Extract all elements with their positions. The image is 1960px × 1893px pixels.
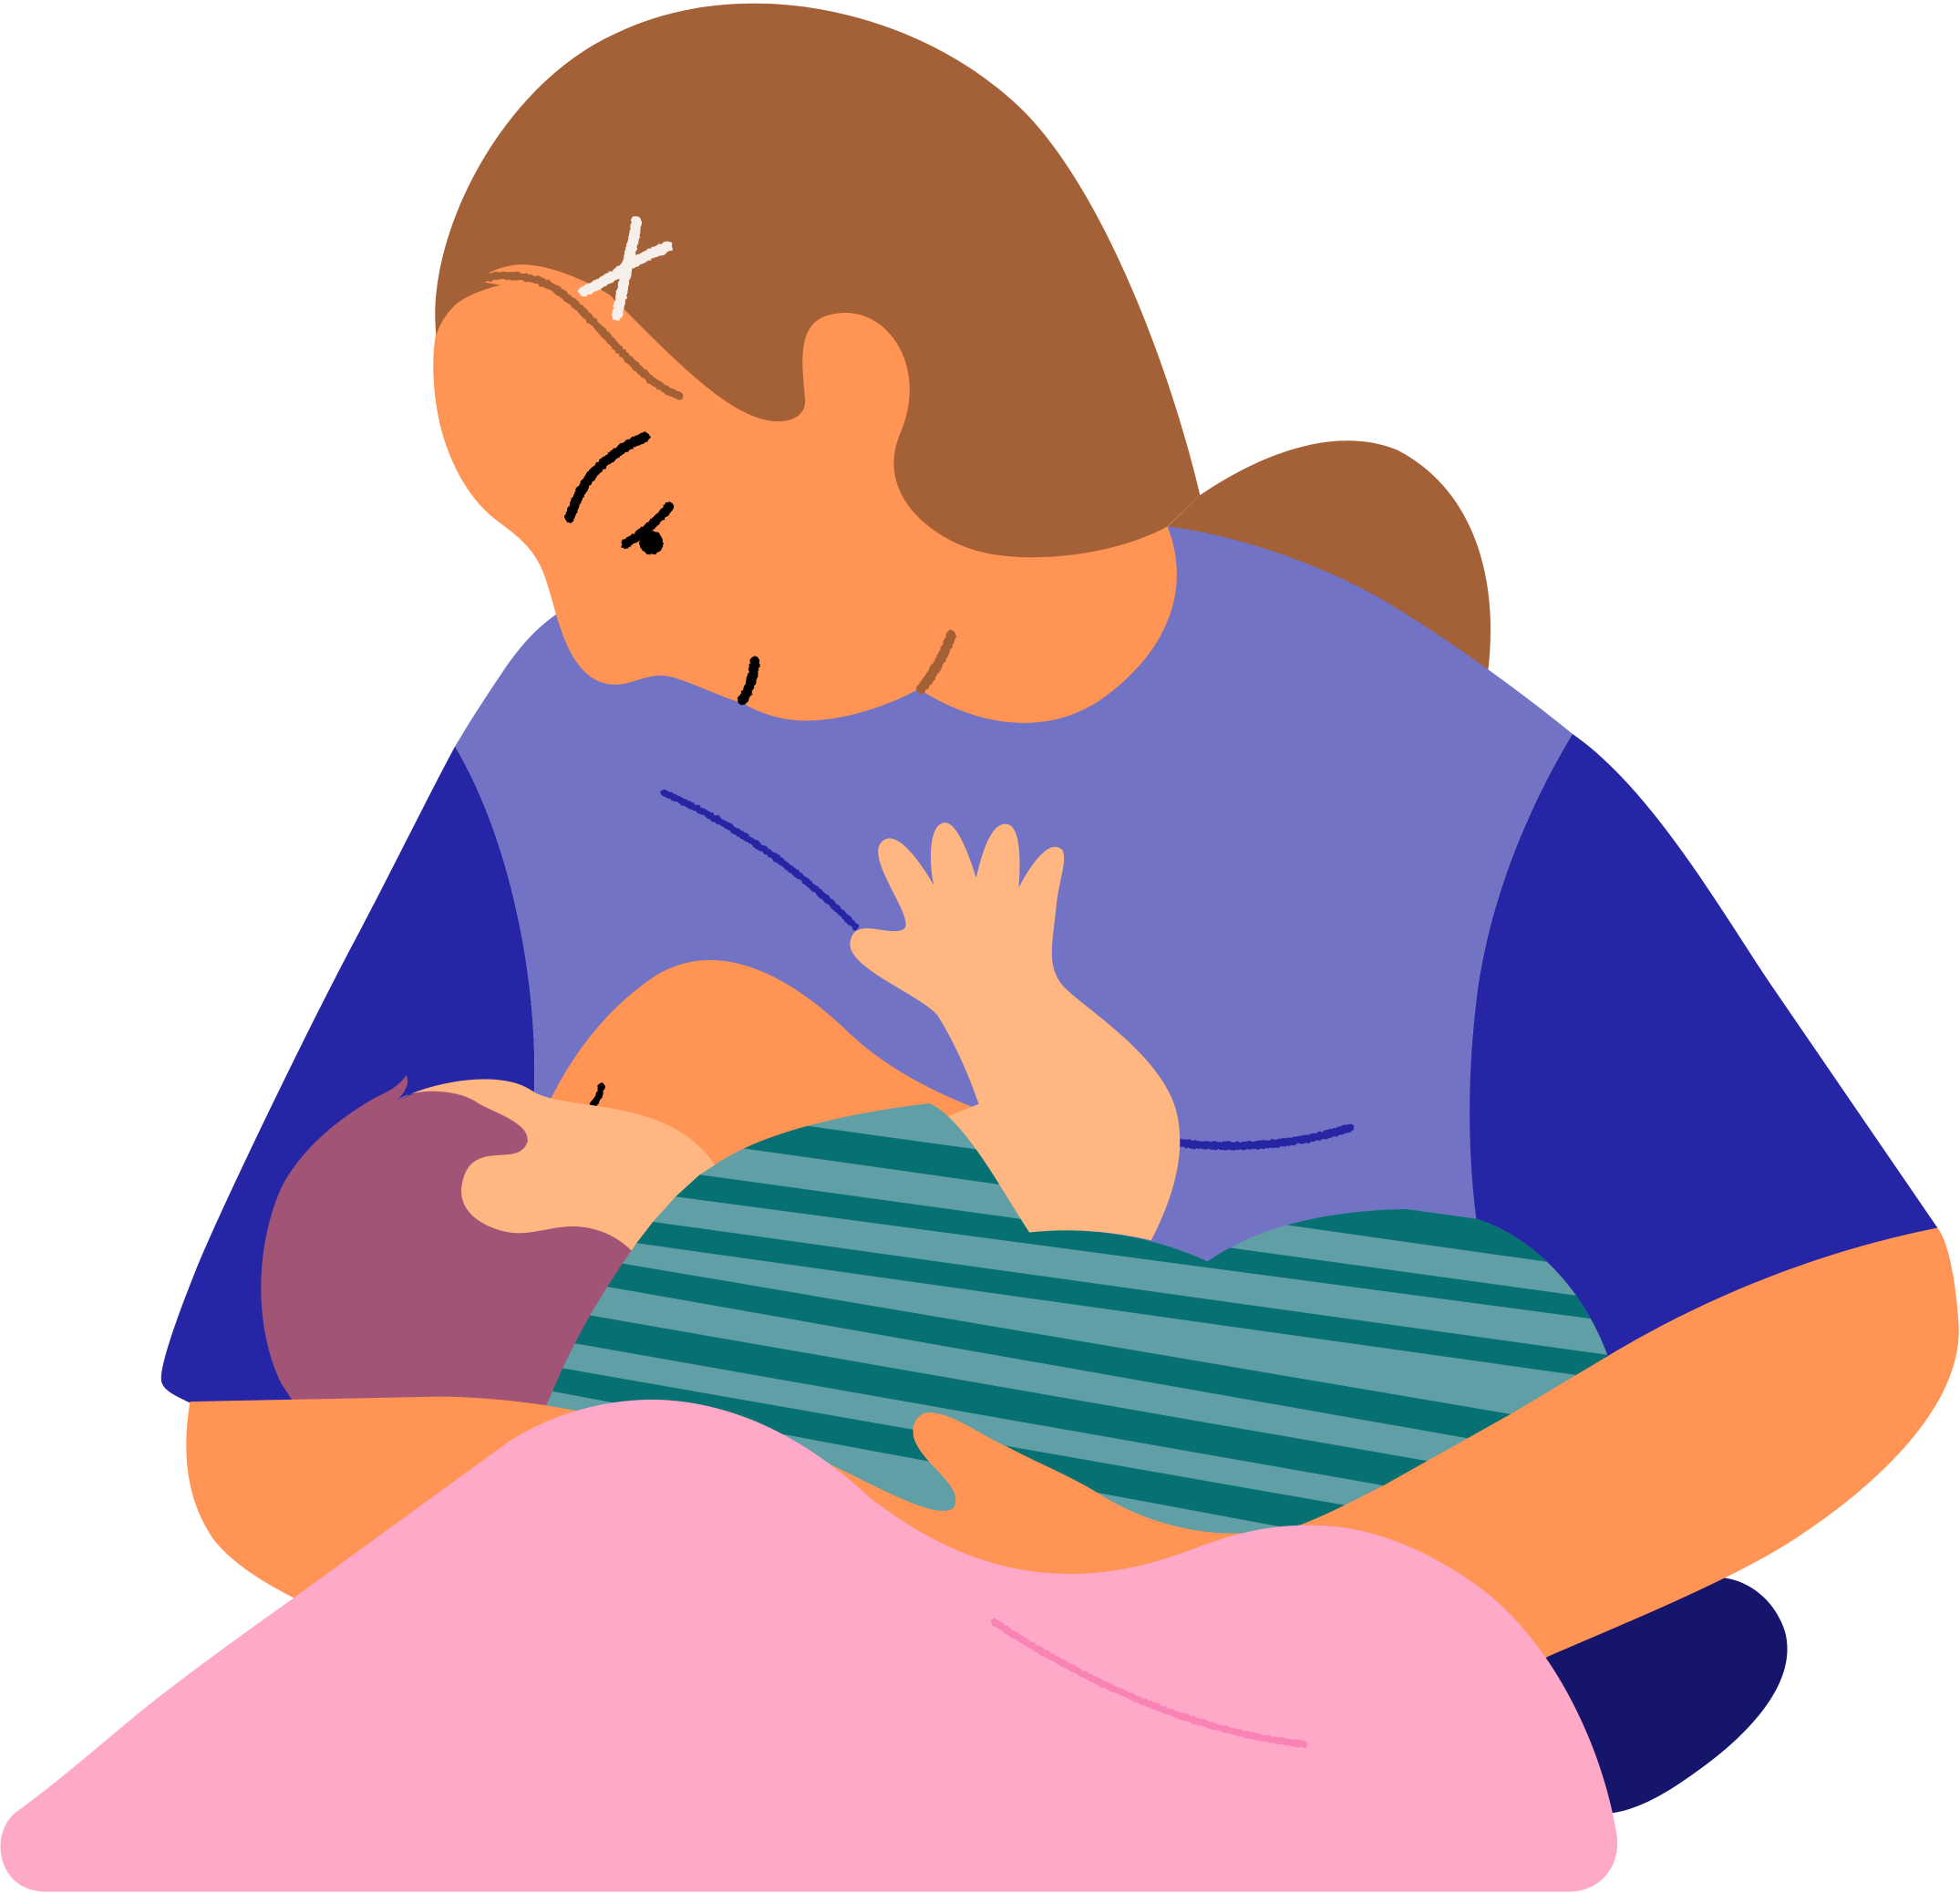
mother's lap, arm and supporting hand [186,1228,1959,1775]
closed eye [625,506,669,554]
shirt crease strokes [664,792,1350,1146]
blanket crease [994,1621,1304,1744]
nipple mark [593,1087,602,1104]
baby hair [261,1075,663,1412]
hair strand [476,275,680,396]
shirt torso [455,526,1573,1276]
breast [550,960,981,1200]
baby striped onesie [546,1103,1608,1534]
mother's hair [435,4,1200,557]
onesie base [546,1103,1608,1534]
mother's hand [850,822,1180,1240]
hair bun [1156,440,1491,675]
baby face [397,1079,738,1263]
eyebrow [570,437,645,518]
neck crease [922,636,951,689]
foot [1500,1578,1788,1813]
mother's face [433,225,1177,723]
onesie stripes [552,1125,1607,1526]
right sleeve [1462,734,1937,1363]
left sleeve [161,747,550,1407]
mouth [742,661,755,700]
pink blanket [1,1400,1617,1892]
hair clip [583,222,667,316]
